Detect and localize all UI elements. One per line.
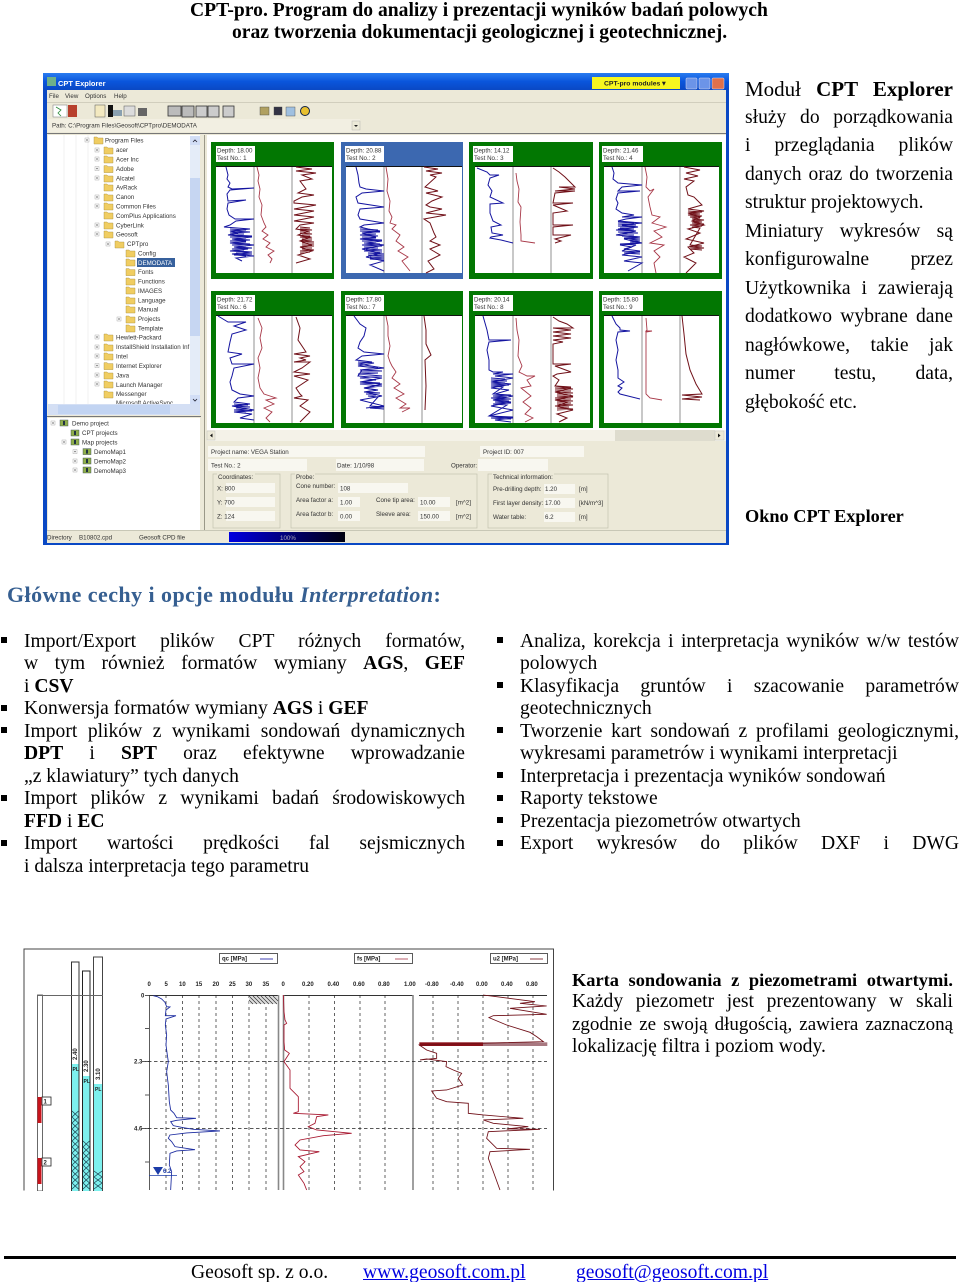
footer rule bbox=[4, 1256, 956, 1259]
group: coordinates: Y: 700 bbox=[217, 500, 235, 506]
thumbnail: test 6: Test No.: 6 bbox=[217, 304, 247, 311]
thumbnail: test 1: Depth: 18.00 bbox=[217, 148, 253, 154]
axes and grid: 4.6 bbox=[134, 1126, 143, 1132]
group: coordinates bbox=[213, 473, 280, 528]
title: oraz tworzenia dokumentacji geologicznej i geotechnicznej. bbox=[232, 22, 727, 43]
list: right column features: Tworzenie kart sondowań z profilami geologicznymi, bbox=[520, 721, 959, 742]
menu bar: Options bbox=[85, 93, 106, 100]
folder tree: Microsoft ActiveSync bbox=[116, 400, 173, 407]
group: probe: 108 bbox=[340, 486, 351, 492]
thumbnail: test 2 (selected): Depth: 20.88 bbox=[346, 148, 382, 154]
thumbnail: test 1 bbox=[211, 142, 334, 279]
project tree: Demo project bbox=[72, 420, 109, 428]
title bar: CPT Explorer bbox=[58, 79, 106, 88]
piezometer columns: 2.40 bbox=[73, 1048, 79, 1060]
text block: CPT Explorer module description: Moduł CPT Explorer bbox=[745, 77, 953, 101]
group: technical information: 6.2 bbox=[545, 514, 554, 521]
piezometer columns: 2.30 bbox=[84, 1060, 90, 1072]
group: technical information: [m] bbox=[579, 514, 588, 521]
info panel: project details: Date: 1/10/98 bbox=[337, 462, 375, 470]
group: probe: 150.00 bbox=[420, 514, 439, 520]
fs trace bbox=[283, 995, 352, 1190]
thumbnail: test 9: Depth: 15.80 bbox=[603, 296, 639, 304]
list: left column features: i dalsza interpretacja tego parametru bbox=[24, 856, 309, 877]
thumbnail: test 3 bbox=[469, 142, 593, 279]
path bar: Path: C:\Program Files\Geosoft\CPTpro\DEMODATA bbox=[52, 122, 198, 130]
thumbnail: test 6 bbox=[211, 291, 334, 428]
title bbox=[190, 0, 768, 43]
group: technical information: [m] bbox=[579, 486, 588, 493]
group: probe: [m^2] bbox=[456, 514, 471, 520]
menu bar: File bbox=[49, 93, 60, 100]
folder tree: Intel bbox=[116, 354, 128, 360]
status bar: B10802.cpd bbox=[79, 534, 113, 542]
folder tree: Java bbox=[116, 372, 130, 380]
axes and grid: 0 bbox=[282, 982, 286, 988]
list: left column features: Import wartości prędkości fal sejsmicznych bbox=[24, 833, 465, 854]
text block: chart description bbox=[572, 970, 954, 1057]
thumbnail: test 6: Depth: 21.72 bbox=[217, 296, 253, 304]
list: right column features: Klasyfikacja gruntów i szacowanie parametrów bbox=[520, 676, 959, 697]
group: coordinates: X: 800 bbox=[217, 486, 235, 492]
thumbnail: test 4: Test No.: 4 bbox=[603, 155, 633, 162]
text block: CPT Explorer module description: dodatkowo wybrane dane bbox=[745, 306, 953, 327]
list: left column features: Import plików z wynikami badań środowiskowych bbox=[24, 788, 465, 809]
folder tree: Alcatel bbox=[116, 176, 135, 182]
folder tree: IMAGES bbox=[138, 288, 162, 295]
status bar: 100% bbox=[280, 535, 296, 542]
folder tree: Messenger bbox=[116, 391, 147, 398]
group: probe: Sleeve area: bbox=[376, 511, 411, 518]
group: probe bbox=[291, 473, 477, 528]
info panel: project details bbox=[208, 446, 584, 471]
list: right column features: wykresami parametrów i wynikami interpretacji bbox=[520, 743, 898, 764]
text block: CPT Explorer module description: struktur projektowych. bbox=[745, 192, 924, 213]
status bar bbox=[47, 530, 726, 542]
text block: chart description: Karta sondowania z piezometrami otwartymi. bbox=[572, 970, 953, 990]
folder tree: Language bbox=[138, 298, 166, 304]
folder tree: Launch Manager bbox=[116, 382, 162, 389]
list: right column features bbox=[497, 631, 959, 854]
folder tree bbox=[48, 135, 200, 415]
piezometer columns: PL bbox=[95, 1087, 101, 1093]
folder tree: Hewlett-Packard bbox=[116, 334, 162, 342]
axes and grid: 0.20 bbox=[302, 982, 314, 988]
folder tree: ComPlus Applications bbox=[116, 213, 176, 220]
axes and grid: 0.60 bbox=[353, 982, 365, 988]
axes and grid: 0.00 bbox=[476, 982, 488, 988]
thumbnail: test 4 bbox=[599, 142, 722, 279]
title: CPT-pro. Program do analizy i prezentacji wyników badań polowych bbox=[190, 0, 768, 21]
axes and grid: 2.3 bbox=[134, 1060, 143, 1066]
text block: CPT Explorer module description: numer testu, data, bbox=[745, 363, 953, 384]
text block: chart description: lokalizację filtra i poziom wody. bbox=[572, 1036, 826, 1057]
folder tree: Common Files bbox=[116, 204, 156, 210]
project tree bbox=[47, 416, 201, 530]
list: left column features: Import/Export plików CPT różnych formatów, bbox=[24, 631, 465, 652]
piezometer columns bbox=[38, 957, 103, 1191]
legends bbox=[220, 954, 548, 964]
folder tree: Internet Explorer bbox=[116, 363, 162, 370]
menu bar: View bbox=[65, 93, 79, 100]
status bar: Geosoft CPD file bbox=[139, 534, 186, 542]
folder tree: Config bbox=[138, 250, 156, 258]
heading: main features: Główne cechy i opcje modułu Interpretation: bbox=[7, 582, 441, 607]
text block: CPT Explorer module description bbox=[745, 77, 954, 413]
info panel: project details: Project ID: 007 bbox=[483, 449, 524, 456]
piezometer columns: 2 bbox=[44, 1160, 48, 1166]
folder tree: Manual bbox=[138, 306, 158, 314]
thumbnail: test 3: Test No.: 3 bbox=[474, 155, 504, 162]
axes and grid: -0.80 bbox=[425, 982, 439, 988]
folder tree: Adobe bbox=[116, 166, 134, 173]
title bar bbox=[43, 73, 729, 90]
group: coordinates: Coordinates: bbox=[218, 474, 253, 481]
hatched layer bbox=[249, 996, 278, 1004]
list: right column features: Analiza, korekcja i interpretacja wyników w/w testów bbox=[520, 631, 959, 652]
list: left column features: DPT i SPT oraz efektywne wprowadzanie bbox=[24, 743, 465, 764]
axes and grid: -0.40 bbox=[450, 982, 464, 988]
info panel: project details: Project name: VEGA Station bbox=[211, 449, 289, 456]
group: probe: 10.00 bbox=[420, 500, 436, 506]
thumbnail: test 2 (selected) bbox=[341, 142, 463, 279]
toolbar bbox=[53, 105, 310, 117]
axes and grid: 30 bbox=[246, 982, 253, 988]
caption: CPT Explorer window: Okno CPT Explorer bbox=[745, 506, 904, 526]
menu bar bbox=[47, 93, 726, 102]
thumbnail: test 7: Test No.: 7 bbox=[346, 304, 376, 311]
axes and grid: 0 bbox=[141, 994, 145, 1000]
title bar: CPT-pro modules ▾ bbox=[604, 80, 666, 88]
axes and grid: 35 bbox=[262, 982, 270, 988]
folder tree: Fonts bbox=[138, 269, 153, 276]
list: left column features: „z klawiatury” tych danych bbox=[24, 766, 239, 787]
list: left column features: w tym również formatów wymiany AGS, GEF bbox=[24, 653, 465, 674]
text block: CPT Explorer module description: Miniatury wykresów są bbox=[745, 221, 953, 242]
axes and grid: 25 bbox=[229, 982, 236, 988]
list: left column features: Konwersja formatów wymiany AGS i GEF bbox=[24, 698, 369, 719]
group: probe: [m^2] bbox=[456, 500, 471, 506]
text block: CPT Explorer module description: głębokość etc. bbox=[745, 392, 857, 413]
text block: CPT Explorer module description: konfigurowalne przez bbox=[745, 249, 953, 270]
path bar bbox=[47, 119, 726, 134]
folder tree: DEMODATA bbox=[138, 260, 173, 267]
folder tree: acer bbox=[116, 147, 128, 154]
piezometer columns: PL bbox=[84, 1079, 90, 1085]
project tree: Map projects bbox=[82, 440, 117, 446]
axes and grid: 10 bbox=[179, 982, 186, 988]
thumbnail: test 4: Depth: 21.46 bbox=[603, 148, 639, 154]
footer bbox=[191, 1262, 768, 1282]
u2 trace bbox=[419, 995, 547, 1190]
list: right column features: geotechnicznych bbox=[520, 698, 652, 719]
axes and grid: 0.80 bbox=[378, 982, 390, 988]
group: probe: Cone tip area: bbox=[376, 497, 415, 504]
text block: CPT Explorer module description: danych oraz do tworzenia bbox=[745, 164, 953, 185]
list: left column features: i CSV bbox=[24, 676, 74, 697]
folder tree: Projects bbox=[138, 316, 160, 323]
list: right column features: Interpretacja i prezentacja wyników sondowań bbox=[520, 766, 886, 787]
group: technical information: Technical information: bbox=[493, 474, 553, 481]
axes and grid bbox=[134, 982, 547, 1190]
group: technical information: First layer density: bbox=[493, 500, 543, 507]
folder tree: Geosoft bbox=[116, 232, 138, 238]
project tree: DemoMap3 bbox=[94, 468, 127, 475]
text block: chart description: zgodnie ze swoją długością, zawiera zaznaczoną bbox=[572, 1014, 953, 1035]
axes and grid: 0.80 bbox=[526, 982, 538, 988]
group: probe: 0.00 bbox=[340, 514, 353, 520]
info panel: project details: Operator: bbox=[451, 462, 477, 470]
water table marker bbox=[149, 1167, 177, 1176]
thumbnail: test 9: Test No.: 9 bbox=[603, 304, 633, 311]
project tree: DemoMap2 bbox=[94, 458, 127, 466]
project tree: DemoMap1 bbox=[94, 449, 127, 456]
text block: CPT Explorer module description: Użytkownika i zawierają bbox=[745, 278, 953, 299]
folder tree: InstallShield Installation Inf bbox=[116, 344, 190, 351]
thumbnail: test 7 bbox=[341, 291, 463, 428]
folder tree: Acer Inc bbox=[116, 156, 139, 164]
thumbnail: test 2 (selected): Test No.: 2 bbox=[346, 155, 376, 162]
group: probe: Area factor b: bbox=[296, 511, 333, 518]
water table marker: 6.2 bbox=[163, 1169, 172, 1175]
legends: fs [MPa] bbox=[357, 956, 380, 962]
group: technical information: [kN/m^3] bbox=[579, 500, 603, 507]
list: right column features: Export wykresów do plików DXF i DWG bbox=[520, 833, 959, 854]
group: coordinates: Z: 124 bbox=[217, 514, 235, 520]
group: technical information: Water table: bbox=[493, 514, 526, 521]
screenshot: CPT Explorer window bbox=[43, 73, 729, 545]
project tree: CPT projects bbox=[82, 430, 118, 437]
piezometer columns: 3.10 bbox=[96, 1068, 102, 1080]
thumbnail: test 8 bbox=[469, 291, 593, 428]
group: technical information: Pre-drilling depth: bbox=[493, 486, 542, 493]
axes and grid: 0.40 bbox=[328, 982, 340, 988]
list: right column features: polowych bbox=[520, 653, 597, 674]
info panel: project details: Test No.: 2 bbox=[211, 462, 241, 470]
horizontal scrollbar bbox=[207, 430, 726, 441]
thumbnail: test 1: Test No.: 1 bbox=[217, 155, 247, 162]
group: probe: 1.00 bbox=[340, 500, 353, 506]
folder tree: Template bbox=[138, 326, 164, 332]
piezometer columns: 1 bbox=[44, 1100, 48, 1106]
legends: qc [MPa] bbox=[222, 956, 247, 962]
folder tree: AvRack bbox=[116, 184, 138, 192]
thumbnail: test 7: Depth: 17.80 bbox=[346, 296, 382, 304]
list: right column features: Prezentacja piezometrów otwartych bbox=[520, 811, 801, 832]
group: probe: Area factor a: bbox=[296, 497, 333, 504]
thumbnail: test 3: Depth: 14.12 bbox=[474, 148, 510, 154]
list: left column features bbox=[1, 631, 465, 877]
thumbnail: test 8: Test No.: 8 bbox=[474, 304, 504, 311]
axes and grid: 15 bbox=[196, 982, 203, 988]
list: right column features: Raporty tekstowe bbox=[520, 788, 658, 809]
text block: CPT Explorer module description: służy do porządkowania bbox=[745, 107, 953, 128]
group: technical information: 17.00 bbox=[545, 500, 561, 507]
menu bar: Help bbox=[114, 93, 127, 100]
piezometer columns: PL bbox=[72, 1067, 79, 1073]
thumbnail: test 9 bbox=[599, 291, 722, 428]
chart: sounding chart with open piezometers bbox=[24, 948, 554, 1191]
folder tree: Canon bbox=[116, 194, 135, 201]
text block: chart description: Każdy piezometr jest prezentowany w skali bbox=[572, 991, 953, 1012]
folder tree: CyberLink bbox=[116, 222, 145, 230]
thumbnail: test 8: Depth: 20.14 bbox=[474, 296, 510, 304]
list: left column features: FFD i EC bbox=[24, 811, 105, 832]
legends: u2 [MPa] bbox=[493, 956, 518, 962]
text block: CPT Explorer module description: nagłówkowe, takie jak bbox=[745, 335, 953, 356]
group: technical information: 1.20 bbox=[545, 486, 558, 493]
axes and grid: 5 bbox=[164, 982, 168, 988]
qc trace bbox=[153, 996, 220, 1190]
list: left column features: Import plików z wynikami sondowań dynamicznych bbox=[24, 721, 465, 742]
group: probe: Cone number: bbox=[296, 483, 335, 490]
group: probe: Probe: bbox=[296, 474, 315, 481]
status bar: Directory bbox=[47, 534, 73, 542]
group: technical information bbox=[488, 473, 608, 528]
axes and grid: 0 bbox=[148, 982, 152, 988]
text block: CPT Explorer module description: i przeglądania plików bbox=[745, 135, 953, 156]
folder tree: Program Files bbox=[105, 138, 144, 144]
axes and grid: 20 bbox=[212, 982, 220, 988]
folder tree: CPTpro bbox=[127, 241, 149, 248]
folder tree: Functions bbox=[138, 278, 165, 286]
axes and grid: 0.40 bbox=[501, 982, 513, 988]
axes and grid: 1.00 bbox=[404, 982, 416, 988]
